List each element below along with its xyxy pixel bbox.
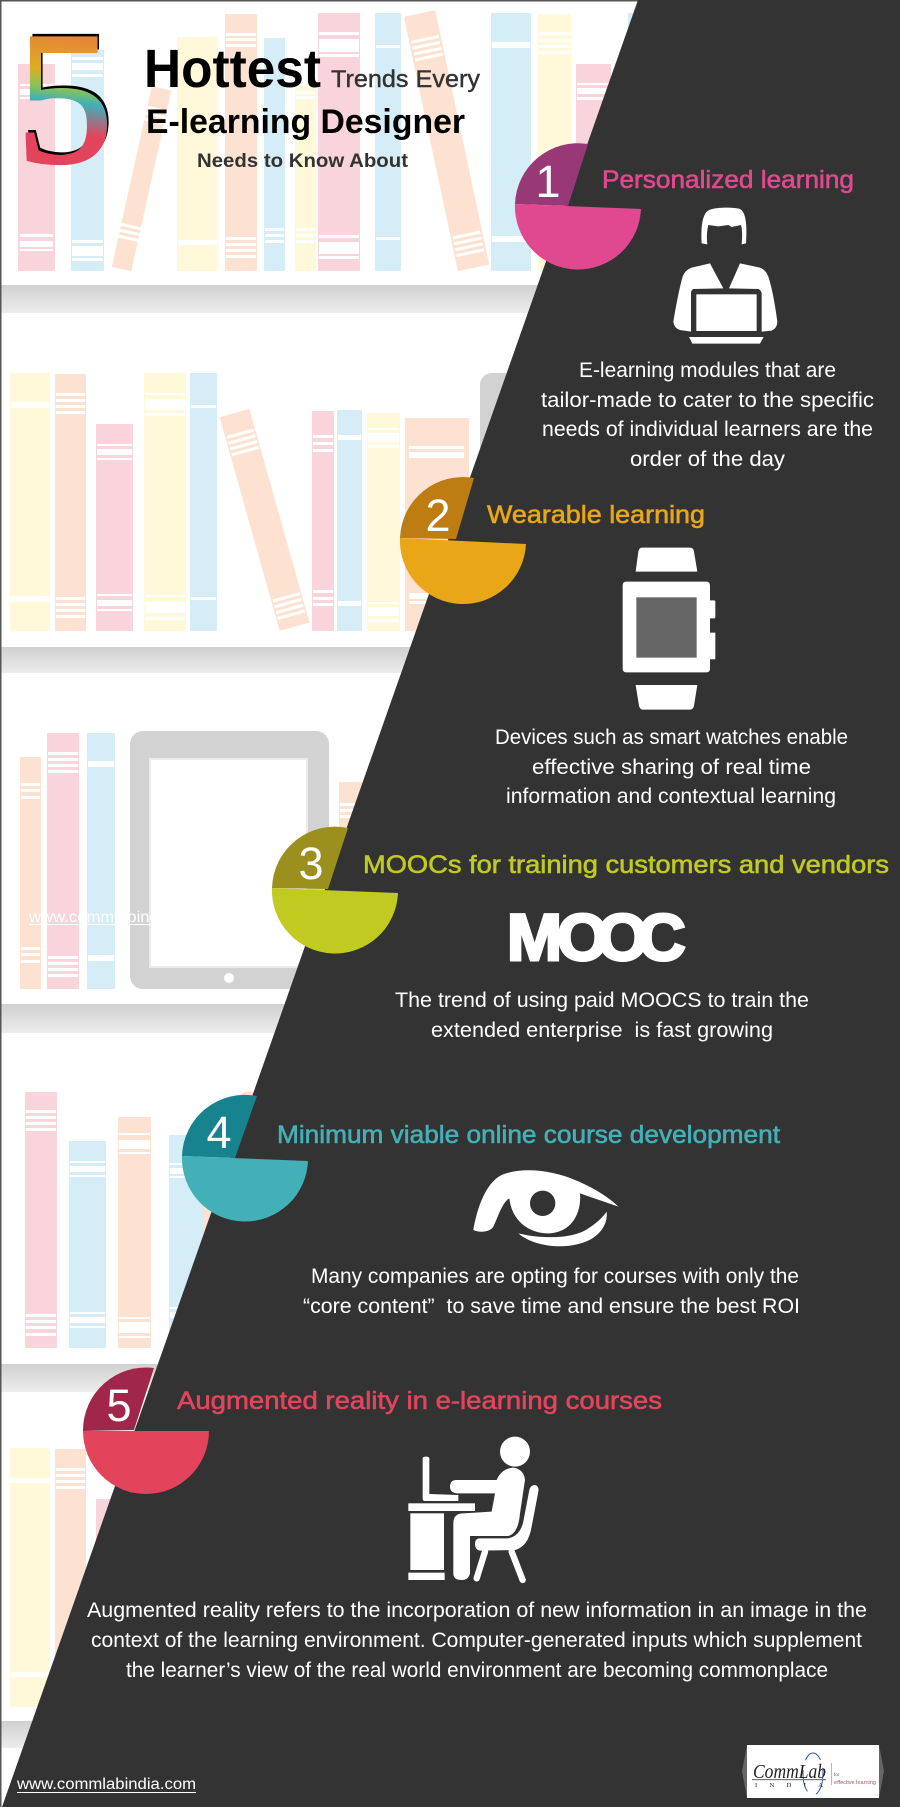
pie badge 1: 1 xyxy=(535,156,561,207)
panel: trend 2 wearable learning xyxy=(400,477,848,808)
icon: smart watch xyxy=(623,548,715,710)
title xyxy=(16,0,480,204)
description 3 xyxy=(395,989,809,1042)
title word Hottest: Hottest xyxy=(144,39,321,99)
heading 1: Personalized learning xyxy=(602,166,854,194)
panel: trend 4 minimum viable course xyxy=(182,1095,800,1318)
description 4: Many companies are opting for courses with only the xyxy=(311,1265,799,1288)
pie badge 4: 4 xyxy=(206,1107,232,1158)
icon: person at desk xyxy=(408,1437,539,1580)
description 4: “core content” to save time and ensure the best ROI xyxy=(303,1295,800,1318)
shelf 2 xyxy=(1,647,421,673)
description 1: tailor-made to cater to the specific xyxy=(541,389,874,412)
shelf row 5 books xyxy=(10,1448,136,1707)
description 4 xyxy=(303,1265,800,1318)
icon: MOOC logo: MOOC xyxy=(507,900,686,974)
shelf row 2 books xyxy=(10,373,540,631)
description 1: E-learning modules that are xyxy=(579,359,836,382)
pie badge 4 xyxy=(182,1095,308,1222)
tablet xyxy=(130,731,329,989)
pie badge 3 xyxy=(272,827,398,954)
title line Needs to Know About: Needs to Know About xyxy=(197,151,409,172)
description 3: The trend of using paid MOOCS to train the xyxy=(395,989,809,1012)
icon: eye xyxy=(473,1170,618,1246)
shelf 1 xyxy=(1,285,561,313)
pie badge 1 xyxy=(515,143,641,270)
panel: trend 3 MOOCs xyxy=(272,827,889,1042)
description 5: Augmented reality refers to the incorporation of new information in an image in the xyxy=(87,1599,867,1622)
CommLab India logo: CommLab xyxy=(753,1761,826,1783)
pie badge 5: 5 xyxy=(106,1380,132,1431)
faded website text: www.commlabindia.com xyxy=(28,909,208,926)
CommLab India logo: for xyxy=(834,1772,840,1777)
description 1: needs of individual learners are the xyxy=(542,418,873,441)
shelf 3 xyxy=(1,1004,301,1033)
pie badge 2: 2 xyxy=(425,490,451,541)
description 3: extended enterprise is fast growing xyxy=(431,1019,773,1042)
title words Trends Every: Trends Every xyxy=(331,66,480,93)
CommLab India logo: effective learning xyxy=(834,1780,876,1786)
CommLab India logo: INDIA xyxy=(755,1782,823,1789)
description 2 xyxy=(495,726,848,808)
title line E-learning Designer: E-learning Designer xyxy=(146,103,465,141)
shelf 4 xyxy=(1,1364,191,1392)
heading 2: Wearable learning xyxy=(487,501,705,529)
big numeral 5: 5 xyxy=(16,0,113,204)
shelf 5 xyxy=(1,1721,61,1748)
pie badge 3: 3 xyxy=(298,838,324,889)
heading 3: MOOCs for training customers and vendors xyxy=(363,851,889,879)
description 2: information and contextual learning xyxy=(506,785,836,808)
description 1 xyxy=(541,359,874,471)
shelf row 1 books xyxy=(18,10,638,271)
description 2: Devices such as smart watches enable xyxy=(495,726,848,749)
icon: person with laptop xyxy=(673,208,777,344)
description 5 xyxy=(87,1599,867,1682)
shelf row 3 books xyxy=(20,733,371,989)
description 1: order of the day xyxy=(630,448,786,471)
heading 5: Augmented reality in e-learning courses xyxy=(177,1387,662,1415)
panel: trend 5 augmented reality xyxy=(83,1367,867,1682)
description 5: the learner’s view of the real world environment are becoming commonplace xyxy=(126,1659,828,1682)
page border xyxy=(0,0,640,1807)
bookshelf background xyxy=(1,10,638,1748)
pie badge 2 xyxy=(400,477,526,604)
panel: trend 1 personalized learning xyxy=(515,143,874,471)
description 2: effective sharing of real time xyxy=(532,756,811,779)
footer website link: www.commlabindia.com xyxy=(16,1776,196,1793)
shelf row 4 books xyxy=(25,1092,262,1348)
heading 4: Minimum viable online course development xyxy=(277,1121,780,1149)
pie badge 5 xyxy=(83,1367,209,1494)
CommLab India logo xyxy=(742,1745,884,1798)
description 5: context of the learning environment. Computer-generated inputs which supplement xyxy=(91,1629,862,1652)
